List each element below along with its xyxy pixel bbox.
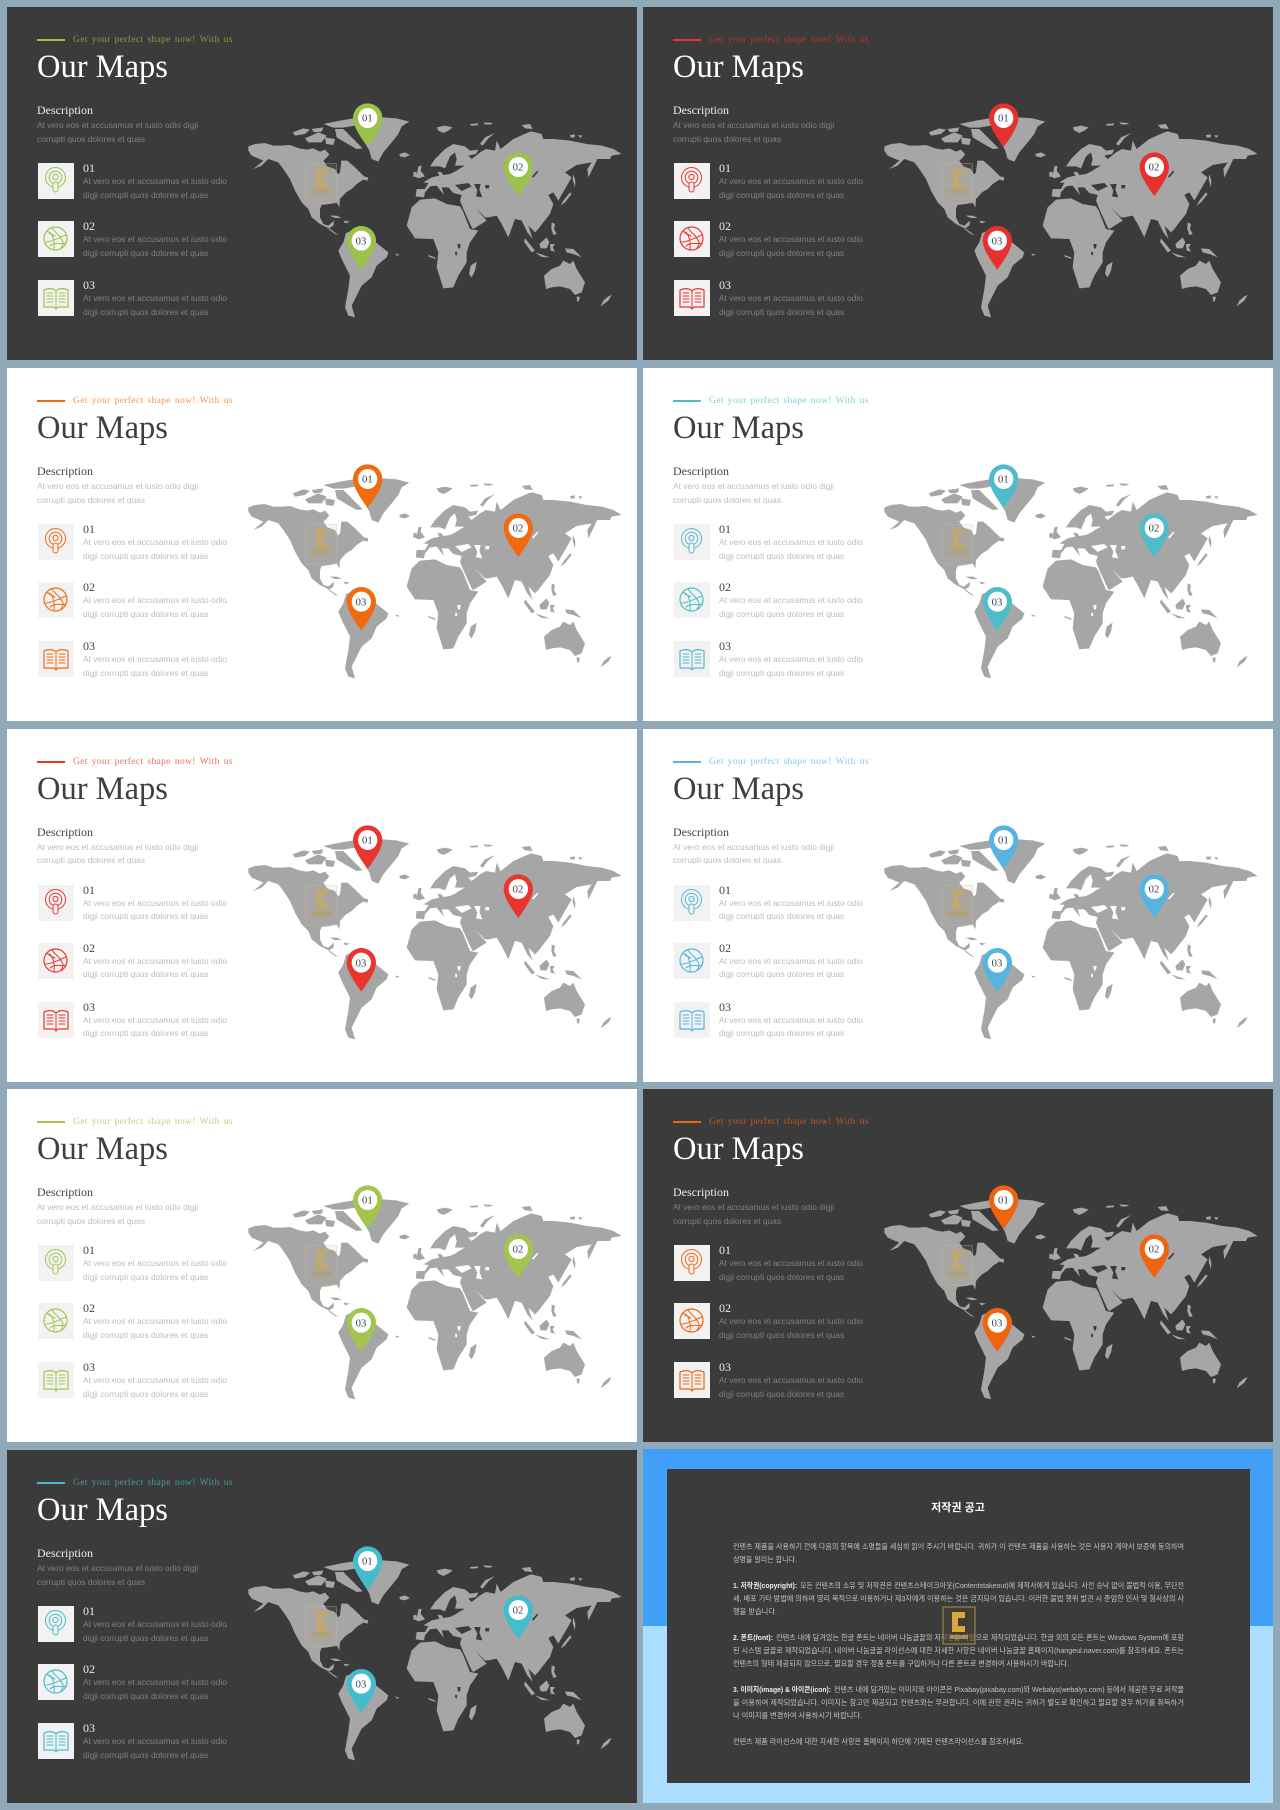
item 03	[38, 1000, 227, 1038]
description text	[673, 481, 834, 505]
world map with pins: 02	[1149, 523, 1159, 534]
notice body: 성명을 알리는 합니다.	[733, 1554, 797, 1564]
item 01: digji corrupti quos dolores et quas	[719, 1272, 844, 1282]
item 02: 02	[719, 580, 731, 594]
item 03: At vero eos et accusamus et iusto odio	[719, 654, 863, 664]
item 02: At vero eos et accusamus et iusto odio	[719, 234, 863, 244]
item 01: At vero eos et accusamus et iusto odio	[719, 1258, 863, 1268]
tagline: Get your perfect shape now! With us	[73, 396, 233, 406]
item 03	[38, 278, 227, 317]
item 02	[38, 1301, 227, 1340]
item 02	[38, 1664, 238, 1701]
world map with pins: 02	[513, 1245, 523, 1256]
description text: corrupti quos dolores et quas	[673, 1216, 781, 1226]
description text: At vero eos et accusamus et iusto odio digji	[673, 842, 834, 852]
item 01	[38, 1243, 227, 1282]
tagline: Get your perfect shape now! With us	[709, 396, 869, 406]
item 02: 02	[719, 1301, 731, 1315]
item 02: digji corrupti quos dolores et quas	[83, 1330, 208, 1340]
notice body: 세, 배포 기타 방법에 의하여 영리 목적으로 이용하거나 제3자에게 이용하는 것은 금지되어 있습니다. 이러한 불법 행위 발견 시 준엄한 민사 및 형사상의 사	[733, 1593, 1184, 1603]
item 02	[38, 580, 227, 619]
title: Our Maps	[37, 49, 168, 85]
world map with pins: 01	[362, 474, 373, 485]
panel: slide 5 light red	[7, 728, 637, 1082]
description text	[37, 1562, 198, 1590]
item 01	[38, 522, 227, 561]
item 03: 03	[719, 639, 731, 653]
item 03: 03	[83, 639, 95, 653]
item 01	[38, 882, 227, 921]
tagline: Get your perfect shape now! With us	[73, 756, 233, 766]
item 03: At vero eos et accusamus et iusto odio	[83, 1014, 227, 1024]
item 01: At vero eos et accusamus et iusto odio	[719, 537, 863, 547]
item 01: digji corrupti quos dolores et quas	[83, 1633, 208, 1643]
item 01: 01	[719, 1243, 731, 1257]
item 02	[674, 219, 863, 258]
description text: At vero eos et accusamus et iusto odio digji	[673, 120, 834, 130]
item 02: At vero eos et accusamus et iusto odio	[719, 956, 863, 966]
item 02: At vero eos et accusamus et iusto odio	[83, 234, 227, 244]
item 01: At vero eos et accusamus et iusto odio	[83, 1258, 227, 1268]
item 01: 01	[83, 161, 95, 175]
description text: At vero eos et accusamus et iusto odio digji	[37, 481, 198, 491]
item 01	[674, 882, 863, 921]
description text	[37, 842, 198, 865]
description text: At vero eos et accusamus et iusto odio digji	[37, 120, 198, 130]
item 03: At vero eos et accusamus et iusto odio	[719, 1375, 863, 1385]
item 03: At vero eos et accusamus et iusto odio	[83, 1736, 227, 1746]
tagline: Get your perfect shape now! With us	[709, 756, 869, 766]
world map with pins: 01	[998, 835, 1009, 846]
description text: corrupti quos dolores et quas	[37, 1577, 145, 1587]
item 03: 03	[83, 1360, 95, 1374]
item 01: digji corrupti quos dolores et quas	[719, 911, 844, 921]
item 02: digji corrupti quos dolores et quas	[719, 609, 844, 619]
icon: gold C logo	[943, 1607, 975, 1644]
panel: copyright notice	[643, 1449, 1273, 1803]
panel: slide 1 dark green	[7, 7, 637, 360]
description heading: Description	[37, 103, 93, 117]
description heading: Description	[37, 824, 93, 838]
item 03: At vero eos et accusamus et iusto odio	[83, 293, 227, 303]
item 03	[674, 278, 863, 317]
item 03	[674, 1000, 863, 1038]
panel: slide 3 light orange	[7, 368, 637, 721]
world map with pins: 03	[356, 597, 366, 608]
item 01: At vero eos et accusamus et iusto odio	[719, 898, 863, 908]
title: Our Maps	[37, 770, 168, 806]
world map with pins	[248, 825, 622, 1040]
notice body: 컨텐츠 제품 라이선스에 대한 자세한 사항은 홈페이지 하단에 기재된 컨텐츠라이선스를 참조하세요.	[733, 1736, 1024, 1746]
description heading: Description	[673, 103, 729, 117]
description text	[37, 481, 198, 505]
item 01: At vero eos et accusamus et iusto odio	[83, 898, 227, 908]
item 01: 01	[719, 522, 731, 536]
tagline rule	[673, 400, 701, 402]
world map with pins: 02	[513, 884, 523, 895]
world map with pins: 03	[356, 1319, 366, 1330]
panel: slide 2 dark red	[643, 7, 1273, 360]
world map with pins: 01	[998, 114, 1009, 125]
item 02: digji corrupti quos dolores et quas	[83, 1691, 208, 1701]
item 03	[674, 639, 863, 678]
description text: corrupti quos dolores et quas	[37, 855, 145, 865]
item 01: digji corrupti quos dolores et quas	[719, 551, 844, 561]
item 02: 02	[83, 1301, 95, 1315]
item 01	[674, 1243, 863, 1282]
item 01: At vero eos et accusamus et iusto odio	[719, 176, 863, 186]
world map with pins: 03	[356, 1679, 366, 1690]
world map with pins	[248, 464, 622, 678]
item 01: 01	[719, 882, 731, 896]
item 01: At vero eos et accusamus et iusto odio	[83, 1619, 227, 1629]
description text	[673, 1202, 834, 1226]
item 03	[38, 639, 227, 678]
world map with pins: 03	[992, 236, 1002, 247]
world map with pins: 01	[362, 114, 373, 125]
item 03: 03	[83, 1721, 95, 1735]
item 03: 03	[83, 278, 95, 292]
tagline: Get your perfect shape now! With us	[73, 1478, 233, 1488]
world map with pins: 02	[1149, 163, 1159, 174]
item 01: digji corrupti quos dolores et quas	[83, 190, 208, 200]
item 03: digji corrupti quos dolores et quas	[719, 1389, 844, 1399]
notice body: 컨텐츠 내에 담겨있는 이미지와 아이콘은 Pixabay(pixabay.com)와 Webalys(webalys.com) 등에서 제공한 무료 저작물	[834, 1684, 1184, 1694]
item 03: digji corrupti quos dolores et quas	[83, 668, 208, 678]
notice body: 된 시스템 글꼴로 제작되었습니다. 네이버 나눔글꼴 라이선스에 대한 자세한 사항은 네이버 나눔글꼴 홈페이지(hangeul.naver.com)를 참조하세요. 폰트는	[733, 1645, 1184, 1655]
title: Our Maps	[37, 1131, 168, 1167]
description text: At vero eos et accusamus et iusto odio digji	[37, 1563, 198, 1573]
item 01: 01	[83, 1243, 95, 1257]
tagline rule	[673, 39, 701, 41]
item 02	[38, 940, 227, 979]
item 03: At vero eos et accusamus et iusto odio	[719, 1014, 863, 1024]
title: Our Maps	[37, 410, 168, 446]
tagline: Get your perfect shape now! With us	[73, 35, 233, 45]
item 02: 02	[83, 219, 95, 233]
description text: corrupti quos dolores et quas	[37, 1216, 145, 1226]
item 01: digji corrupti quos dolores et quas	[83, 911, 208, 921]
world map with pins: 02	[513, 163, 523, 174]
item 03: At vero eos et accusamus et iusto odio	[83, 1375, 227, 1385]
item 03: 03	[719, 1000, 731, 1014]
tagline rule	[37, 760, 65, 762]
world map with pins	[248, 103, 622, 318]
title: Our Maps	[673, 1131, 804, 1167]
item 01: At vero eos et accusamus et iusto odio	[83, 537, 227, 547]
description text: corrupti quos dolores et quas	[37, 134, 145, 144]
item 02: At vero eos et accusamus et iusto odio	[83, 956, 227, 966]
item 02: digji corrupti quos dolores et quas	[83, 248, 208, 258]
world map with pins	[884, 464, 1258, 678]
panel: slide 6 light blue	[643, 728, 1273, 1082]
world map with pins: 01	[362, 835, 373, 846]
item 01	[38, 1606, 238, 1643]
title: Our Maps	[673, 49, 804, 85]
item 02: 02	[719, 219, 731, 233]
title: Our Maps	[673, 770, 804, 806]
item 01: 01	[83, 1604, 95, 1618]
item 02: At vero eos et accusamus et iusto odio	[719, 595, 863, 605]
item 03: 03	[719, 1360, 731, 1374]
description text	[673, 842, 834, 865]
notice body: 2. 폰트(font):	[733, 1633, 773, 1642]
description text: corrupti quos dolores et quas	[673, 134, 781, 144]
tagline rule	[37, 1121, 65, 1123]
item 03	[38, 1360, 227, 1399]
title: Our Maps	[37, 1492, 168, 1528]
item 03	[674, 1360, 863, 1399]
item 02: At vero eos et accusamus et iusto odio	[83, 1316, 227, 1326]
item 02: 02	[83, 580, 95, 594]
description text	[37, 120, 198, 144]
item 02: digji corrupti quos dolores et quas	[719, 1330, 844, 1340]
item 02: digji corrupti quos dolores et quas	[719, 969, 844, 979]
item 01: 01	[83, 882, 95, 896]
item 02: 02	[83, 940, 95, 954]
description text: corrupti quos dolores et quas	[37, 495, 145, 505]
title: Our Maps	[673, 410, 804, 446]
item 02: At vero eos et accusamus et iusto odio	[83, 595, 227, 605]
tagline rule	[673, 1121, 701, 1123]
world map with pins: 02	[513, 523, 523, 534]
world map with pins: 03	[356, 958, 366, 969]
world map with pins	[884, 1185, 1258, 1400]
item 03: digji corrupti quos dolores et quas	[719, 1028, 844, 1038]
item 01: 01	[83, 522, 95, 536]
notice body: 컨텐츠 내에 담겨있는 한글 폰트는 네이버 나눔글꼴의 저작권을 바탕으로 제작되었습니다. 한글 외의 모든 폰트는 Windows System에 포함	[776, 1632, 1184, 1642]
world map with pins: 01	[998, 1196, 1009, 1207]
item 01: 01	[719, 161, 731, 175]
world map with pins: 01	[998, 474, 1009, 485]
notice body: 을 이용하여 제작되었습니다. 이미지는 참고만 제공되고 컨텐츠와는 무관합니다. 이에 관한 권리는 귀하가 별도로 확인하고 필요할 경우 허가를 취득하거	[733, 1697, 1184, 1707]
item 02: digji corrupti quos dolores et quas	[83, 969, 208, 979]
item 01: digji corrupti quos dolores et quas	[719, 190, 844, 200]
tagline rule	[673, 760, 701, 762]
item 03	[38, 1723, 238, 1760]
item 02	[674, 1301, 863, 1340]
notice body: 행을 받습니다.	[733, 1606, 777, 1616]
item 03: digji corrupti quos dolores et quas	[83, 1389, 208, 1399]
world map with pins: 03	[992, 958, 1002, 969]
notice body: 컨텐츠의 형태 제공되지 않으므로, 필요할 경우 정품 폰트를 구입하거나 다른 폰트로 변경하여 사용하시기 바랍니다.	[733, 1658, 1069, 1668]
item 02: 02	[83, 1662, 95, 1676]
item 03: At vero eos et accusamus et iusto odio	[719, 293, 863, 303]
item 02	[38, 219, 227, 258]
item 03: 03	[719, 278, 731, 292]
notice body: 1. 저작권(copyright):	[733, 1580, 797, 1590]
world map with pins	[248, 1185, 622, 1400]
notice body: 모든 컨텐츠의 소유 및 저작권은 컨텐츠스테이크아웃(Contentstakeout)에 제작사에게 있습니다. 사전 승낙 없이 불법적 이용, 무단전	[800, 1580, 1184, 1590]
item 02	[674, 940, 863, 979]
tagline: Get your perfect shape now! With us	[73, 1117, 233, 1127]
item 01: digji corrupti quos dolores et quas	[83, 551, 208, 561]
description text	[673, 120, 834, 144]
panel: slide 7 light green	[7, 1089, 637, 1442]
item 02: At vero eos et accusamus et iusto odio	[83, 1677, 227, 1687]
item 03: digji corrupti quos dolores et quas	[83, 307, 208, 317]
notice body: 나 이미지를 변경하여 사용하시기 바랍니다.	[733, 1710, 862, 1720]
tagline: Get your perfect shape now! With us	[709, 35, 869, 45]
notice body	[733, 1541, 1184, 1746]
item 03: digji corrupti quos dolores et quas	[719, 307, 844, 317]
item 03: digji corrupti quos dolores et quas	[719, 668, 844, 678]
tagline rule	[37, 1482, 65, 1484]
description heading: Description	[37, 464, 93, 478]
item 03: At vero eos et accusamus et iusto odio	[83, 654, 227, 664]
tagline rule	[37, 39, 65, 41]
item 01	[674, 522, 863, 561]
description text: At vero eos et accusamus et iusto odio digji	[673, 1202, 834, 1212]
panel: slide 8 dark orange	[643, 1089, 1273, 1442]
world map with pins: 02	[1149, 884, 1159, 895]
world map with pins: 01	[362, 1557, 373, 1568]
panel: slide 9 dark teal	[7, 1450, 637, 1803]
item 01: digji corrupti quos dolores et quas	[83, 1272, 208, 1282]
world map with pins: 02	[1149, 1245, 1159, 1256]
description heading: Description	[37, 1546, 93, 1560]
item 01	[38, 161, 227, 200]
description heading: Description	[673, 464, 729, 478]
notice title: 저작권 공고	[931, 1500, 985, 1514]
notice body: 컨텐츠 제품을 사용하기 전에 다음의 항목에 소명들을 세심히 읽어 주시기 바랍니다. 귀하가 이 컨텐츠 제품을 사용하는 것은 사용자 계약서 보증에 동의하여	[733, 1541, 1184, 1551]
panel: slide 4 light teal	[643, 368, 1273, 721]
item 02	[674, 580, 863, 619]
item 01	[674, 161, 863, 200]
item 02: At vero eos et accusamus et iusto odio	[719, 1316, 863, 1326]
description text: At vero eos et accusamus et iusto odio digji	[37, 1202, 198, 1212]
tagline rule	[37, 400, 65, 402]
world map with pins: 03	[992, 1319, 1002, 1330]
description heading: Description	[673, 824, 729, 838]
item 02: digji corrupti quos dolores et quas	[719, 248, 844, 258]
world map with pins	[884, 103, 1258, 318]
description text: At vero eos et accusamus et iusto odio digji	[673, 481, 834, 491]
description text: At vero eos et accusamus et iusto odio digji	[37, 842, 198, 852]
world map with pins	[240, 1512, 640, 1772]
item 02: digji corrupti quos dolores et quas	[83, 609, 208, 619]
world map with pins: 03	[992, 597, 1002, 608]
description heading: Description	[37, 1185, 93, 1199]
item 01: At vero eos et accusamus et iusto odio	[83, 176, 227, 186]
world map with pins	[884, 825, 1258, 1040]
world map with pins: 03	[356, 236, 366, 247]
item 02: 02	[719, 940, 731, 954]
description text: corrupti quos dolores et quas	[673, 855, 781, 865]
notice body: 3. 이미지(image) & 아이콘(icon):	[733, 1684, 831, 1694]
world map with pins: 02	[513, 1606, 523, 1617]
description text: corrupti quos dolores et quas	[673, 495, 781, 505]
item 03: digji corrupti quos dolores et quas	[83, 1028, 208, 1038]
world map with pins: 01	[362, 1196, 373, 1207]
description text	[37, 1202, 198, 1226]
item 03: digji corrupti quos dolores et quas	[83, 1750, 208, 1760]
item 03: 03	[83, 1000, 95, 1014]
tagline: Get your perfect shape now! With us	[709, 1117, 869, 1127]
description heading: Description	[673, 1185, 729, 1199]
